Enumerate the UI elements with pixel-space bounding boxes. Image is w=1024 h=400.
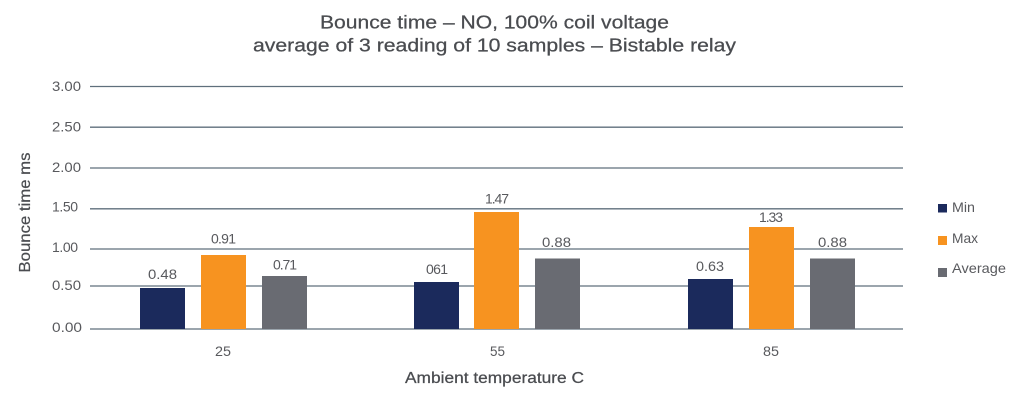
bar group: 25 xyxy=(140,230,307,329)
legend: Average xyxy=(952,260,1006,276)
bar group: 55: 1.47 xyxy=(485,190,509,206)
title: average of 3 reading of 10 samples – Bistable relay xyxy=(253,36,736,56)
bar group: 25: 0.91 xyxy=(211,230,236,246)
y axis labels: 2.50 xyxy=(52,118,81,134)
bar group: 85: 0.88 xyxy=(818,234,847,250)
x axis labels: 55 xyxy=(490,343,505,359)
y axis labels: 2.00 xyxy=(52,159,81,175)
bar group: 55: 061 xyxy=(426,261,448,277)
bar group: 25: 0.71 xyxy=(273,256,297,272)
x axis title: Ambient temperature C xyxy=(405,370,584,387)
y axis labels xyxy=(52,78,82,335)
title: Bounce time – NO, 100% coil voltage xyxy=(320,12,669,32)
x axis labels xyxy=(215,343,779,359)
legend: Max xyxy=(952,230,978,246)
bar group: 55: 0.88 xyxy=(542,234,571,250)
y axis labels: 1.50 xyxy=(52,198,78,214)
x axis labels: 85 xyxy=(763,343,779,359)
title xyxy=(253,12,736,56)
y axis labels: 1.00 xyxy=(52,239,78,255)
y axis labels: 0.00 xyxy=(52,319,82,335)
y axis labels: 3.00 xyxy=(52,78,81,94)
y axis labels: 0.50 xyxy=(52,277,81,293)
bar group: 85: 1.33 xyxy=(759,209,783,225)
x axis labels: 25 xyxy=(215,343,231,359)
bar group: 55 xyxy=(414,190,580,329)
legend: Min xyxy=(952,199,975,215)
bar group: 85: 0.63 xyxy=(696,258,724,274)
bar group: 85 xyxy=(688,209,855,329)
y axis title: Bounce time ms xyxy=(17,152,34,272)
legend xyxy=(938,199,1006,277)
bar group: 25: 0.48 xyxy=(148,266,177,282)
